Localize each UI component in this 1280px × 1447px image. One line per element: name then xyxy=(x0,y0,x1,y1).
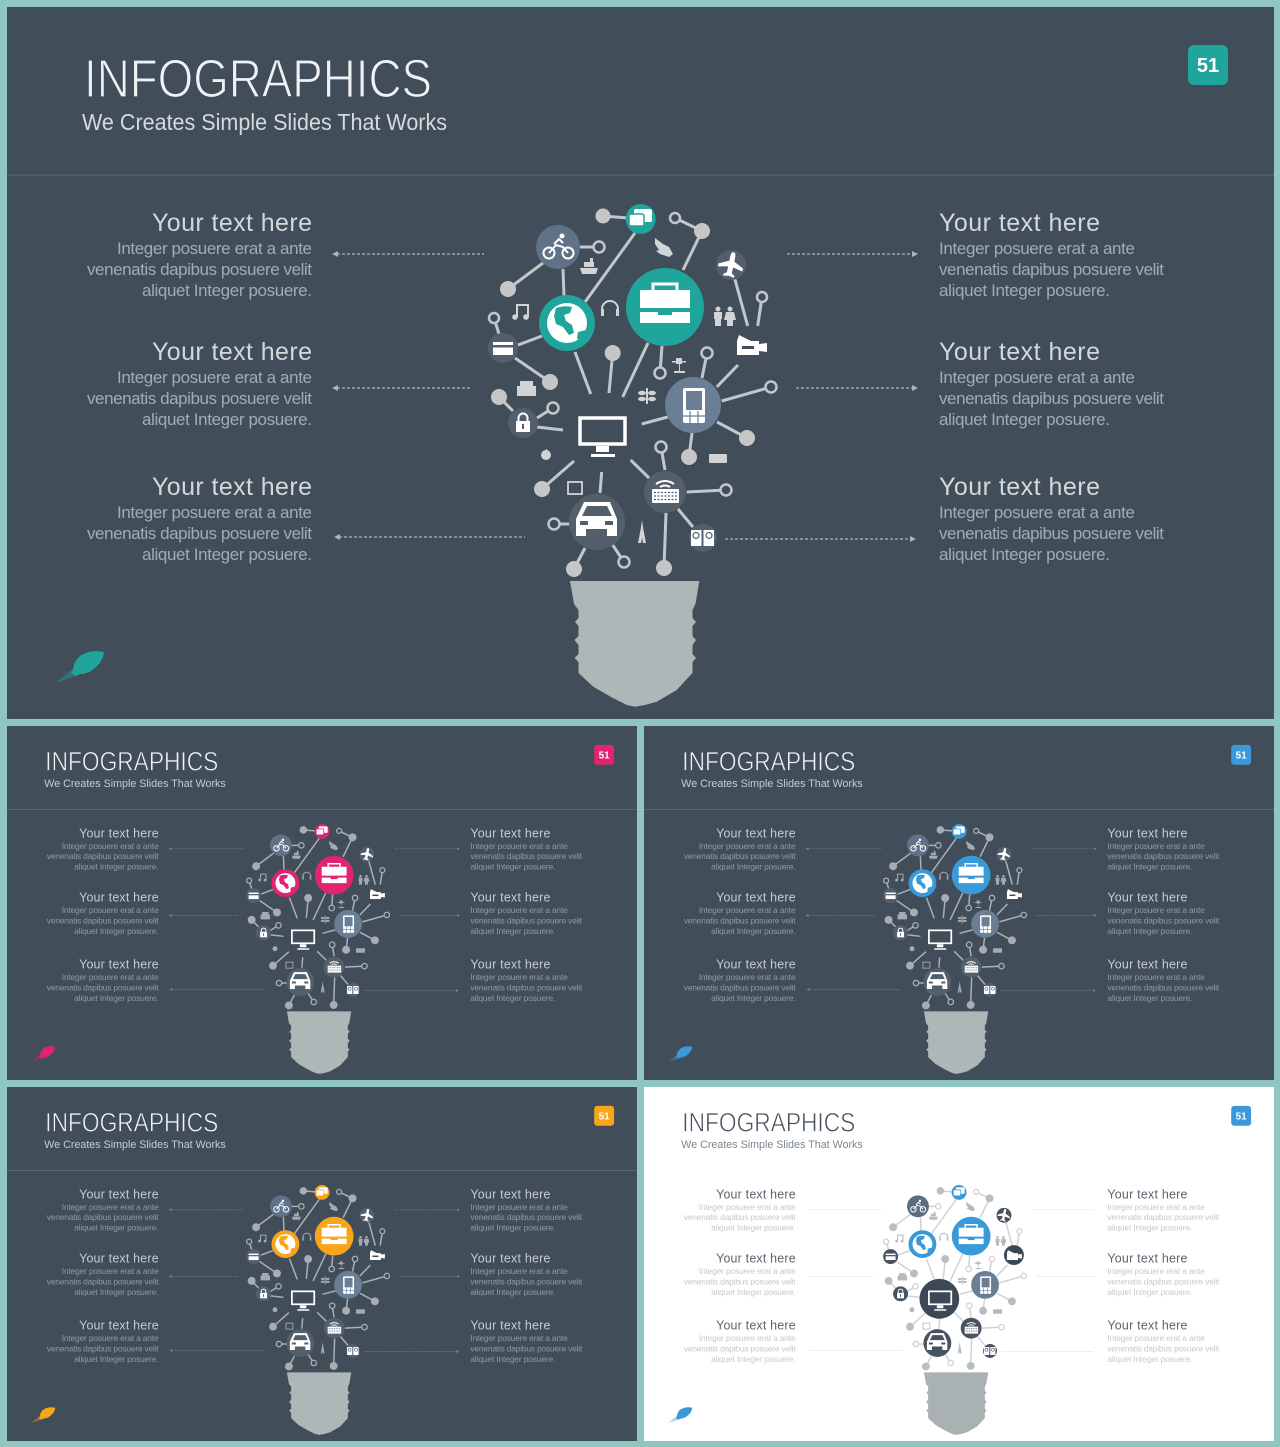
text block: left 2: venenatis dapibus posuere velit xyxy=(684,1276,796,1286)
text block: left 3: aliquet Integer posuere. xyxy=(142,545,312,564)
icon: chat xyxy=(626,204,656,234)
page badge: 51 xyxy=(599,750,610,761)
text block: left 2: venenatis dapibus posuere velit xyxy=(47,915,159,925)
page badge xyxy=(1231,745,1251,765)
page badge xyxy=(1231,1106,1251,1126)
text block: left 2 xyxy=(684,891,796,936)
text block: right 1: Integer posuere erat a ante xyxy=(470,841,568,851)
arrows: dotted pointers xyxy=(332,251,918,542)
text block: left 3: Integer posuere erat a ante xyxy=(699,1333,796,1343)
text block: right 1: Integer posuere erat a ante xyxy=(939,239,1135,258)
text block: right 2: Your text here xyxy=(939,338,1100,366)
text block: left 1: venenatis dapibus posuere velit xyxy=(87,260,312,279)
text block: right 1: venenatis dapibus posuere velit xyxy=(470,851,583,861)
page badge: 51 xyxy=(599,1111,610,1122)
text block: left 3: Integer posuere erat a ante xyxy=(699,972,796,982)
icon: briefcase xyxy=(626,268,704,346)
title: INFOGRAPHICS xyxy=(682,1108,855,1138)
icon: lock xyxy=(508,408,538,438)
title: INFOGRAPHICS xyxy=(682,747,855,777)
page badge xyxy=(1188,45,1228,85)
text block: left 2 xyxy=(47,1252,159,1297)
icon: rocket xyxy=(668,1407,692,1423)
arrows: dotted pointers xyxy=(169,847,460,992)
icon: bicycle xyxy=(536,225,580,269)
text block: right 3: venenatis dapibus posuere velit xyxy=(470,1344,583,1354)
subtitle: We Creates Simple Slides That Works xyxy=(681,778,863,790)
icon: mobile phone xyxy=(665,377,721,433)
text block: left 2: aliquet Integer posuere. xyxy=(711,1287,796,1297)
text block: left 1: Integer posuere erat a ante xyxy=(699,1202,796,1212)
icon: keyboard xyxy=(644,471,686,513)
page badge: 51 xyxy=(1236,750,1247,761)
text block: left 1: venenatis dapibus posuere velit xyxy=(684,1212,796,1222)
text block: left 1: aliquet Integer posuere. xyxy=(711,862,796,872)
text block: left 1: aliquet Integer posuere. xyxy=(74,862,159,872)
page badge: 51 xyxy=(1197,55,1219,77)
text block: left 1: aliquet Integer posuere. xyxy=(142,281,312,300)
text block: left 1: Your text here xyxy=(79,1187,159,1201)
arrows: dotted pointers xyxy=(806,847,1097,992)
text block: left 1 xyxy=(47,826,159,872)
text block: left 3: Integer posuere erat a ante xyxy=(62,1333,159,1343)
arrows: dotted pointers xyxy=(808,1210,1094,1352)
text block: left 3: venenatis dapibus posuere velit xyxy=(684,983,796,993)
panel: small slide blue xyxy=(644,726,1274,1080)
text block: left 3: venenatis dapibus posuere velit xyxy=(684,1344,796,1354)
text block: left 3: aliquet Integer posuere. xyxy=(74,993,159,1003)
text block: right 3 xyxy=(1107,958,1220,1003)
text block: right 3: aliquet Integer posuere. xyxy=(939,545,1110,564)
panel: small slide white xyxy=(644,1087,1274,1441)
text block: right 1: aliquet Integer posuere. xyxy=(470,1223,555,1233)
text block: right 2: Integer posuere erat a ante xyxy=(1107,1266,1205,1276)
text block: right 3: aliquet Integer posuere. xyxy=(1107,1354,1192,1364)
lightbulb idea network xyxy=(488,204,776,707)
text block: left 3: aliquet Integer posuere. xyxy=(711,993,796,1003)
text block: left 2: venenatis dapibus posuere velit xyxy=(47,1276,159,1286)
text block: right 2: venenatis dapibus posuere velit xyxy=(470,1276,583,1286)
text block: right 1 xyxy=(1107,1187,1220,1233)
text block: right 3: Your text here xyxy=(1107,958,1188,972)
text block: left 2: Integer posuere erat a ante xyxy=(62,1266,159,1276)
text block: left 3: Your text here xyxy=(716,958,796,972)
text block: left 1: Integer posuere erat a ante xyxy=(699,841,796,851)
connector lines xyxy=(494,216,771,569)
text block: right 1: Your text here xyxy=(470,1187,551,1201)
text block: right 1: Integer posuere erat a ante xyxy=(1107,1202,1205,1212)
text block: right 1 xyxy=(1107,826,1220,872)
text block: right 3: Integer posuere erat a ante xyxy=(470,972,568,982)
text block: left 1: Your text here xyxy=(716,826,796,840)
text block: right 1: Your text here xyxy=(939,209,1100,237)
text block: left 1 xyxy=(47,1187,159,1233)
text block: right 2: Integer posuere erat a ante xyxy=(470,1266,568,1276)
text block: right 3: Your text here xyxy=(470,1319,551,1333)
icon: rocket xyxy=(668,1046,692,1062)
subtitle: We Creates Simple Slides That Works xyxy=(681,1139,863,1151)
text block: right 1 xyxy=(470,826,583,872)
icon: monitor xyxy=(561,393,641,473)
text block: right 1: Integer posuere erat a ante xyxy=(1107,841,1205,851)
text block: left 2: Integer posuere erat a ante xyxy=(699,1266,796,1276)
text block: left 3: Your text here xyxy=(79,958,159,972)
text block: right 3: Integer posuere erat a ante xyxy=(1107,972,1205,982)
text block: right 1 xyxy=(470,1187,583,1233)
subtitle: We Creates Simple Slides That Works xyxy=(44,1139,226,1151)
text block: right 2 xyxy=(1107,891,1220,936)
text block: left 1: aliquet Integer posuere. xyxy=(711,1223,796,1233)
icon: rocket xyxy=(31,1407,55,1423)
page badge xyxy=(594,1106,614,1126)
text block: left 3 xyxy=(47,1319,159,1364)
text block: left 2: venenatis dapibus posuere velit xyxy=(87,389,312,408)
text block: left 1: Your text here xyxy=(152,209,312,237)
filled nodes xyxy=(491,208,755,577)
icon: rocket xyxy=(31,1046,55,1062)
text block: left 2: Your text here xyxy=(716,1252,796,1266)
text block: left 3: Integer posuere erat a ante xyxy=(62,972,159,982)
text block: left 3 xyxy=(87,473,312,564)
text block: left 3 xyxy=(47,958,159,1003)
text block: left 1: Integer posuere erat a ante xyxy=(62,841,159,851)
text block: right 2: aliquet Integer posuere. xyxy=(939,410,1110,429)
text block: right 1: aliquet Integer posuere. xyxy=(1107,862,1192,872)
lightbulb idea network xyxy=(246,824,390,1074)
arrows: dotted pointers xyxy=(169,1208,460,1353)
text block: right 1: aliquet Integer posuere. xyxy=(470,862,555,872)
text block: left 1: Integer posuere erat a ante xyxy=(117,239,312,258)
text block: left 2: Your text here xyxy=(79,1252,159,1266)
text block: left 2: Integer posuere erat a ante xyxy=(62,905,159,915)
text block: right 2: venenatis dapibus posuere velit xyxy=(939,389,1164,408)
text block: left 2: aliquet Integer posuere. xyxy=(74,1287,159,1297)
text block: right 2: venenatis dapibus posuere velit xyxy=(470,915,583,925)
text block: left 2 xyxy=(684,1252,796,1297)
text block: right 3: Your text here xyxy=(939,473,1100,501)
panel: small slide pink xyxy=(7,726,637,1080)
text block: right 2 xyxy=(939,338,1164,429)
text block: left 3: Your text here xyxy=(716,1319,796,1333)
text block: right 2: Your text here xyxy=(1107,891,1188,905)
text block: right 2 xyxy=(1107,1252,1220,1297)
text block: right 2: Integer posuere erat a ante xyxy=(1107,905,1205,915)
text block: right 1: Your text here xyxy=(1107,1187,1188,1201)
icon: globe xyxy=(539,295,595,351)
text block: right 2: Your text here xyxy=(470,891,551,905)
text block: left 3: venenatis dapibus posuere velit xyxy=(87,524,312,543)
page badge: 51 xyxy=(1236,1111,1247,1122)
icon: credit card xyxy=(488,333,518,363)
lightbulb idea network xyxy=(246,1185,390,1435)
text block: left 2: Integer posuere erat a ante xyxy=(699,905,796,915)
text block: right 2: venenatis dapibus posuere velit xyxy=(1107,1276,1220,1286)
text block: right 2: Integer posuere erat a ante xyxy=(470,905,568,915)
text block: right 2: aliquet Integer posuere. xyxy=(1107,1287,1192,1297)
text block: left 3: Your text here xyxy=(79,1319,159,1333)
text block: left 1: Integer posuere erat a ante xyxy=(62,1202,159,1212)
text block: right 3 xyxy=(1107,1319,1220,1364)
title: INFOGRAPHICS xyxy=(45,747,218,777)
text block: left 1: venenatis dapibus posuere velit xyxy=(684,851,796,861)
text block: left 2: Your text here xyxy=(716,891,796,905)
text block: right 2: Integer posuere erat a ante xyxy=(939,368,1135,387)
text block: left 1 xyxy=(87,209,312,300)
text block: left 2: Your text here xyxy=(79,891,159,905)
panel: small slide orange xyxy=(7,1087,637,1441)
text block: right 1: aliquet Integer posuere. xyxy=(1107,1223,1192,1233)
text block: right 3 xyxy=(939,473,1164,564)
bulb base xyxy=(570,581,699,707)
text block: left 2 xyxy=(47,891,159,936)
text block: right 3: Your text here xyxy=(470,958,551,972)
text block: right 3: venenatis dapibus posuere velit xyxy=(470,983,583,993)
text block: right 1: Your text here xyxy=(470,826,551,840)
text block: right 1: venenatis dapibus posuere velit xyxy=(939,260,1164,279)
text block: right 3: Integer posuere erat a ante xyxy=(470,1333,568,1343)
icon: speakers xyxy=(689,524,717,552)
text block: right 2: venenatis dapibus posuere velit xyxy=(1107,915,1220,925)
text block: left 2: aliquet Integer posuere. xyxy=(711,926,796,936)
title: INFOGRAPHICS xyxy=(45,1108,218,1138)
text block: right 3 xyxy=(470,1319,583,1364)
text block: right 1: venenatis dapibus posuere velit xyxy=(1107,1212,1220,1222)
text block: right 2: Your text here xyxy=(470,1252,551,1266)
icon: car xyxy=(569,494,625,550)
text block: left 2: aliquet Integer posuere. xyxy=(142,410,312,429)
text block: right 1: aliquet Integer posuere. xyxy=(939,281,1110,300)
text block: left 2: aliquet Integer posuere. xyxy=(74,926,159,936)
icon: airplane xyxy=(716,250,746,280)
text block: right 1: venenatis dapibus posuere velit xyxy=(470,1212,583,1222)
text block: right 2: aliquet Integer posuere. xyxy=(470,926,555,936)
ring nodes xyxy=(489,213,776,568)
text block: right 2: Your text here xyxy=(1107,1252,1188,1266)
text block: right 3: aliquet Integer posuere. xyxy=(470,1354,555,1364)
text block: right 3: Integer posuere erat a ante xyxy=(939,503,1135,522)
text block: right 3: Your text here xyxy=(1107,1319,1188,1333)
text block: left 2: Integer posuere erat a ante xyxy=(117,368,312,387)
text block: left 1 xyxy=(684,1187,796,1233)
panel: main slide teal xyxy=(7,7,1274,719)
text block: right 3: venenatis dapibus posuere velit xyxy=(939,524,1164,543)
text block: right 3: aliquet Integer posuere. xyxy=(470,993,555,1003)
text block: left 3 xyxy=(684,958,796,1003)
page badge xyxy=(594,745,614,765)
text block: left 1 xyxy=(684,826,796,872)
text block: right 1 xyxy=(939,209,1164,300)
text block: right 1: venenatis dapibus posuere velit xyxy=(1107,851,1220,861)
text block: left 3: venenatis dapibus posuere velit xyxy=(47,1344,159,1354)
icon: rocket xyxy=(55,651,104,683)
text block: left 1: Your text here xyxy=(79,826,159,840)
text block: left 3: aliquet Integer posuere. xyxy=(74,1354,159,1364)
subtitle: We Creates Simple Slides That Works xyxy=(82,109,447,135)
text block: left 3: aliquet Integer posuere. xyxy=(711,1354,796,1364)
text block: left 2 xyxy=(87,338,312,429)
text block: right 3: aliquet Integer posuere. xyxy=(1107,993,1192,1003)
text block: left 1: Your text here xyxy=(716,1187,796,1201)
text block: right 3: venenatis dapibus posuere velit xyxy=(1107,1344,1220,1354)
text block: left 3: Your text here xyxy=(152,473,312,501)
title: INFOGRAPHICS xyxy=(84,49,432,109)
text block: left 2: Your text here xyxy=(152,338,312,366)
text block: right 1: Your text here xyxy=(1107,826,1188,840)
text block: left 1: venenatis dapibus posuere velit xyxy=(47,1212,159,1222)
lightbulb idea network xyxy=(883,1185,1027,1435)
icon: video camera xyxy=(731,325,771,365)
text block: left 2: venenatis dapibus posuere velit xyxy=(684,915,796,925)
text block: right 2: aliquet Integer posuere. xyxy=(1107,926,1192,936)
text block: left 3: venenatis dapibus posuere velit xyxy=(47,983,159,993)
text block: left 1: aliquet Integer posuere. xyxy=(74,1223,159,1233)
text block: right 3 xyxy=(470,958,583,1003)
text block: right 2: aliquet Integer posuere. xyxy=(470,1287,555,1297)
subtitle: We Creates Simple Slides That Works xyxy=(44,778,226,790)
text block: right 3: Integer posuere erat a ante xyxy=(1107,1333,1205,1343)
text block: right 1: Integer posuere erat a ante xyxy=(470,1202,568,1212)
text block: right 3: venenatis dapibus posuere velit xyxy=(1107,983,1220,993)
text block: right 2 xyxy=(470,891,583,936)
text block: left 3 xyxy=(684,1319,796,1364)
small line icons xyxy=(512,238,736,543)
text block: left 3: Integer posuere erat a ante xyxy=(117,503,312,522)
lightbulb idea network xyxy=(883,824,1027,1074)
text block: left 1: venenatis dapibus posuere velit xyxy=(47,851,159,861)
text block: right 2 xyxy=(470,1252,583,1297)
